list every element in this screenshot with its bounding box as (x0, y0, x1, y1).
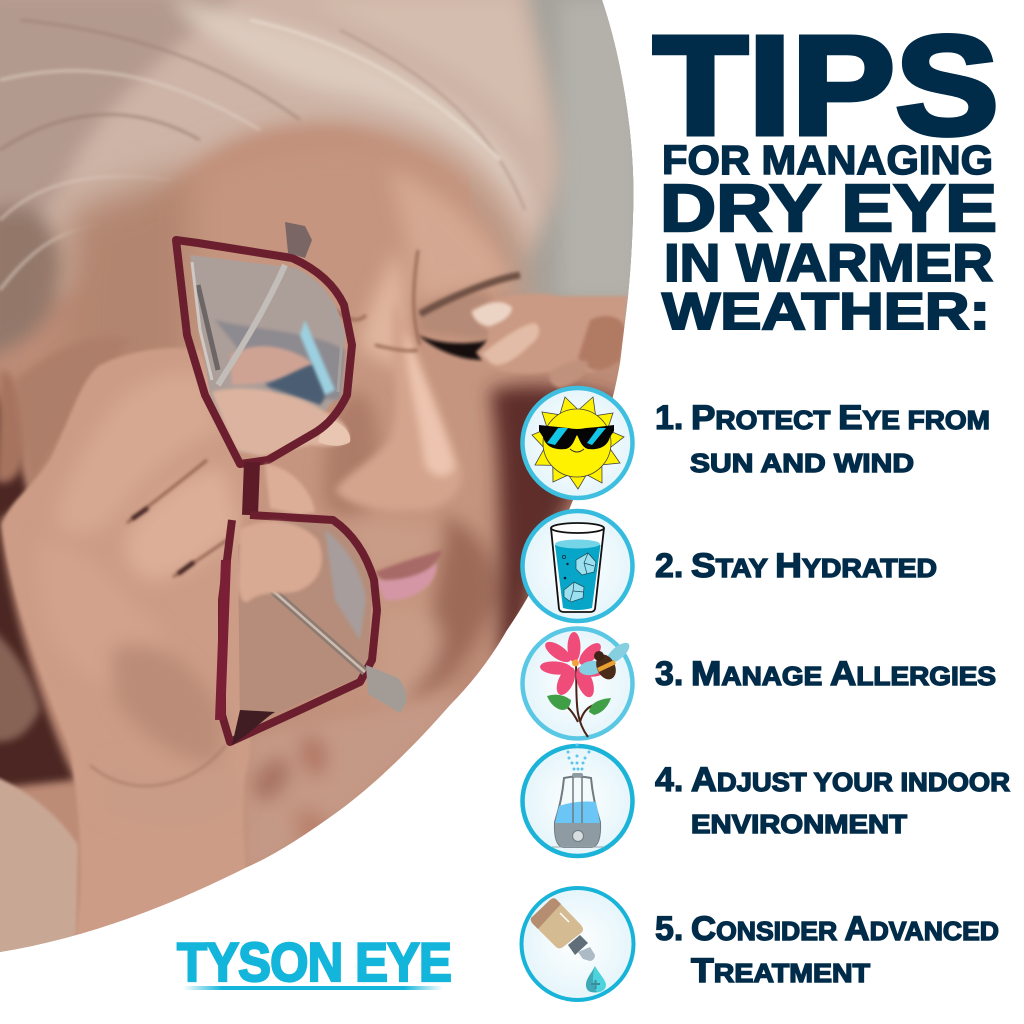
frown lines (335, 250, 420, 351)
heading: FOR MANAGING: FOR MANAGING (662, 137, 993, 183)
heading: IN WARMER: IN WARMER (664, 234, 993, 293)
hair strands (0, 20, 525, 290)
tip 4 text: ADJUST YOUR INDOOR (691, 761, 1010, 799)
under nose (364, 530, 434, 548)
backdrop (506, 0, 634, 320)
logo: Tyson Eye: TYSON EYE (177, 931, 451, 993)
closed eye (418, 335, 490, 360)
icon: humidifier (522, 744, 632, 856)
tip 3 text: MANAGE ALLERGIES (691, 655, 996, 693)
finger over bridge (265, 464, 315, 515)
upper lens (190, 255, 345, 452)
knuckle creases (127, 460, 227, 577)
eye socket (418, 293, 490, 340)
lower lens (238, 515, 372, 728)
forehead and face (60, 138, 525, 705)
finger seen through lens (212, 389, 349, 456)
icon: sun with sunglasses (522, 388, 632, 498)
lips (375, 550, 443, 600)
tip 4 text: ENVIRONMENT (691, 809, 907, 839)
right hand (470, 294, 628, 388)
nose (335, 300, 462, 510)
icon: flower with bee (522, 628, 633, 738)
tip 1 text: SUN AND WIND (690, 448, 914, 478)
tip 1 text: PROTECT EYE FROM (691, 399, 990, 437)
tip 5 text: CONSIDER ADVANCED (691, 910, 999, 948)
tip 5 text (655, 910, 999, 990)
icon: eye drop bottle (522, 888, 634, 1000)
chin (387, 610, 450, 694)
lower frame (222, 515, 377, 742)
bridge (250, 462, 252, 515)
fingernail (318, 418, 350, 446)
jumper (0, 770, 78, 960)
tip 3 text: 3. (655, 655, 683, 693)
heading: DRY EYE: DRY EYE (660, 171, 997, 246)
tip 2 text: STAY HYDRATED (691, 547, 937, 585)
upper frame (176, 240, 352, 464)
tip 2 text: 2. (655, 547, 683, 585)
tip 5 text: TREATMENT (691, 952, 870, 990)
eyebrow (420, 275, 520, 314)
dark left edge (0, 380, 75, 790)
left hand and wrist (2, 348, 252, 940)
cheek right shadow (490, 386, 620, 660)
finger over lower lens (238, 521, 322, 602)
temple arm (272, 590, 365, 672)
neck (244, 691, 456, 868)
temple stub (285, 222, 312, 258)
heading: TIPS: TIPS (653, 6, 999, 164)
title (653, 6, 999, 341)
heading: WEATHER: WEATHER: (662, 283, 990, 341)
tip 4 text (655, 761, 1010, 839)
ear (0, 370, 27, 483)
temple creases (360, 250, 405, 370)
tip 1 text: 1. (655, 399, 683, 437)
tip 4 text: 4. (655, 761, 683, 799)
left cheek side of nose (324, 392, 379, 518)
icon: glass of water with ice (522, 511, 632, 621)
tip 5 text: 5. (655, 910, 683, 948)
tip 1 text (655, 399, 990, 478)
photo: woman rubbing her eyes holding glasses (0, 0, 640, 960)
hair mass (0, 0, 560, 360)
temple skin by the hand (19, 344, 114, 479)
glasses (176, 222, 406, 745)
